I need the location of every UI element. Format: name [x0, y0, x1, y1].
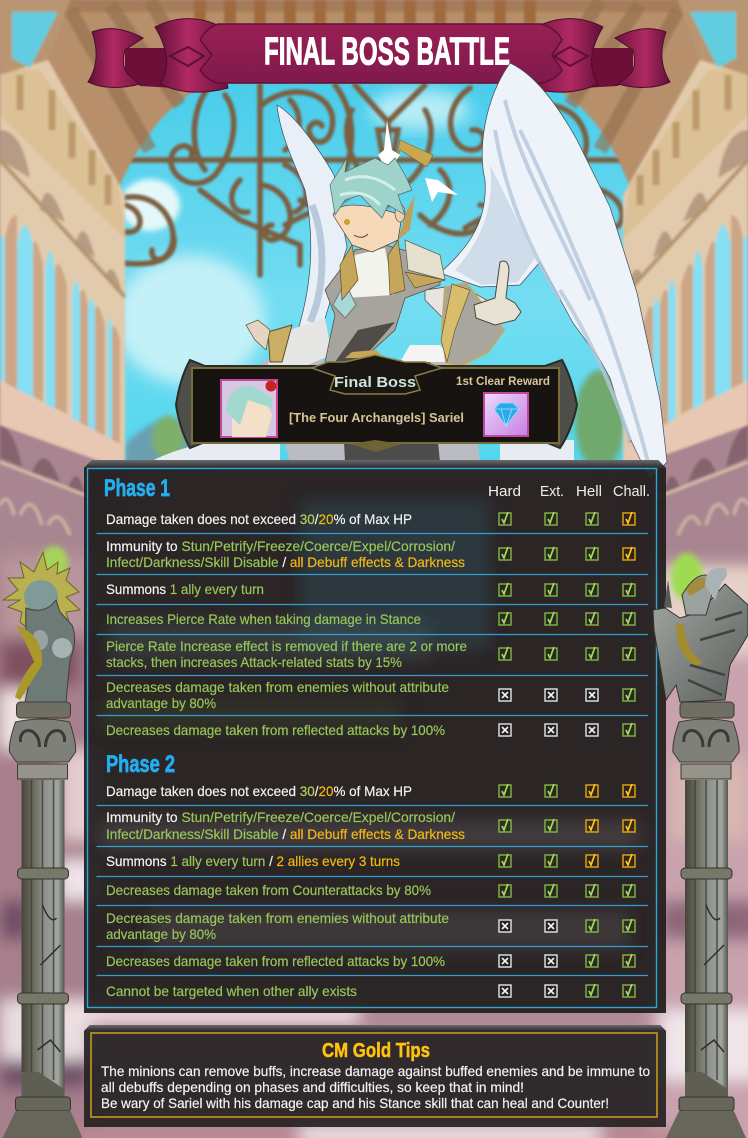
- phase 1 row 6: [106, 679, 635, 711]
- title: FINAL BOSS BATTLE: [264, 30, 510, 74]
- phase 2 row 1: [106, 783, 635, 799]
- tips heading: CM Gold Tips: [322, 1040, 430, 1062]
- phase 2 row 4: [106, 882, 635, 898]
- column headers: Hell: [576, 484, 602, 500]
- phase 2 row 5: [106, 910, 635, 942]
- phase 2 row 1: Damage taken does not exceed 30/20% of Max HP: [106, 783, 412, 799]
- boss plaque: [176, 355, 577, 452]
- column headers: [488, 484, 650, 500]
- phase 1 row 2: [106, 538, 635, 570]
- phase 1 row 4: Increases Pierce Rate when taking damage in Stance: [106, 611, 421, 627]
- plaque: Final Boss: Final Boss: [334, 375, 416, 391]
- tips text: all debuffs depending on phases and difficulties, so keep that in mind!: [101, 1079, 524, 1095]
- character: Sariel: [150, 63, 667, 480]
- phase 1 row 1: [106, 511, 635, 527]
- banner left scrolls: [88, 19, 228, 92]
- phase 1 row 3: Summons 1 ally every turn: [106, 581, 264, 597]
- phase 1 row 5: Pierce Rate Increase effect is removed if there are 2 or more: [106, 638, 467, 654]
- tips text: [101, 1063, 650, 1111]
- phase 2 row 5: advantage by 80%: [106, 926, 216, 942]
- column headers: Hard: [488, 484, 521, 500]
- halo and sparkles: [395, 140, 433, 167]
- phase 1 row 7: Decreases damage taken from reflected attacks by 100%: [106, 722, 445, 738]
- heading: Phase 1: Phase 1: [104, 475, 170, 502]
- phase 2 row 2: Infect/Darkness/Skill Disable / all Debuff effects & Darkness: [106, 826, 465, 842]
- torso: [325, 245, 440, 362]
- phase 1 row 7: [106, 722, 635, 738]
- phase 2 row 6: Decreases damage taken from reflected attacks by 100%: [106, 953, 445, 969]
- blurred floor: [0, 555, 748, 1138]
- head: [333, 205, 402, 252]
- phase 2 row 7: [106, 983, 635, 999]
- plaque: reward label: 1st Clear Reward: [456, 374, 550, 388]
- phase 2 row 4: Decreases damage taken from Counterattacks by 80%: [106, 882, 431, 898]
- right pillar with knight statue: [653, 553, 748, 1138]
- banner centre: [200, 24, 562, 83]
- reward icon: blue gem: [484, 393, 528, 436]
- column headers: Ext.: [540, 484, 564, 500]
- phase 1 row 4: [106, 611, 635, 627]
- iron gate: [122, 85, 622, 275]
- icon: halo statue: [3, 552, 80, 702]
- left pillar with statue: [2, 546, 82, 1138]
- phase 1 row 5: [106, 638, 635, 670]
- phase 2 row 3: [106, 853, 635, 869]
- phase 1 row 1: Damage taken does not exceed 30/20% of Max HP: [106, 511, 412, 527]
- wooden roof arch: [0, 0, 748, 565]
- plaque: boss name: [The Four Archangels] Sariel: [289, 410, 464, 425]
- phase 2 row 6: [106, 953, 635, 969]
- lower feathers behind plaque: [150, 432, 574, 462]
- icon: knight statue: [653, 568, 748, 702]
- lower body: [262, 360, 480, 462]
- heading: Phase 2: Phase 2: [106, 751, 175, 778]
- phase 1 row 3: [106, 581, 635, 597]
- phase 2 row 7: Cannot be targeted when other ally exists: [106, 983, 357, 999]
- phase 2 row 5: Decreases damage taken from enemies without attribute: [106, 910, 449, 926]
- right wing: [440, 63, 667, 480]
- panel: phases table: [84, 460, 666, 1013]
- panel: CM Gold Tips: [84, 1025, 666, 1127]
- left wing: [277, 105, 347, 330]
- phase 1 row 5: stacks, then increases Attack-related stats by 15%: [106, 654, 402, 670]
- phase 1 row 6: Decreases damage taken from enemies without attribute: [106, 679, 449, 695]
- phase 1 row 2: Immunity to Stun/Petrify/Freeze/Coerce/Expel/Corrosion/: [106, 538, 455, 554]
- hair: [330, 158, 412, 218]
- tips text: The minions can remove buffs, increase damage against buffed enemies and be immune to: [101, 1063, 650, 1079]
- phase 1 row 6: advantage by 80%: [106, 695, 216, 711]
- phase 2 row 3: Summons 1 ally every turn / 2 allies every 3 turns: [106, 853, 400, 869]
- column headers: Chall.: [613, 484, 650, 500]
- banner right scrolls: [530, 19, 670, 92]
- phase 2 row 2: Immunity to Stun/Petrify/Freeze/Coerce/Expel/Corrosion/: [106, 809, 455, 825]
- title banner: [88, 19, 670, 92]
- phase 1 row 2: Infect/Darkness/Skill Disable / all Debuff effects & Darkness: [106, 554, 465, 570]
- sleeve arms: [268, 318, 332, 368]
- boss portrait: [221, 380, 277, 437]
- phase 2 row 2: [106, 809, 635, 842]
- tips text: Be wary of Sariel with his damage cap and his Stance skill that can heal and Counter!: [101, 1095, 609, 1111]
